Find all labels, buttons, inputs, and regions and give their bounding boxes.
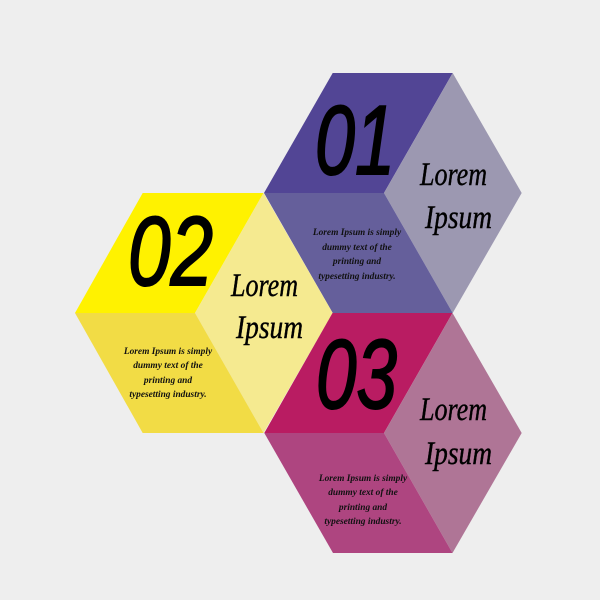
description text: dummy text of the xyxy=(133,361,203,371)
description text: typesetting industry. xyxy=(318,272,396,282)
description text: dummy text of the xyxy=(322,243,392,253)
face: heading panel 02 xyxy=(195,193,333,433)
face: description panel 01 xyxy=(264,193,453,313)
description text: printing and xyxy=(332,257,381,267)
face: number panel 03 xyxy=(264,313,452,433)
description text: dummy text of the xyxy=(328,488,398,498)
description text: typesetting industry. xyxy=(324,517,402,527)
description text: Lorem Ipsum is simply xyxy=(123,347,213,357)
face: number panel 02 xyxy=(75,193,264,313)
face: description panel 02 xyxy=(75,313,264,433)
heading: Lorem Ipsum: Ipsum xyxy=(235,310,303,346)
hexagon 01: purple xyxy=(264,73,522,313)
face: heading panel 03 xyxy=(384,313,522,553)
heading: Lorem Ipsum: Lorem xyxy=(230,268,298,304)
number 03: 03 xyxy=(316,319,397,429)
face: heading panel 01 xyxy=(384,73,522,313)
heading: Lorem Ipsum: Lorem xyxy=(419,392,487,428)
description text: Lorem Ipsum is simply xyxy=(318,474,408,484)
heading: Lorem Ipsum xyxy=(419,392,492,472)
number 01: 01 xyxy=(315,85,395,195)
heading: Lorem Ipsum: Ipsum xyxy=(424,436,492,472)
heading: Lorem Ipsum xyxy=(419,157,492,236)
description text: typesetting industry. xyxy=(129,390,207,400)
description text: printing and xyxy=(143,376,192,386)
number 02: 02 xyxy=(128,196,213,306)
description text: Lorem Ipsum is simply xyxy=(312,228,402,238)
description text: printing and xyxy=(338,503,387,513)
hexagon 02: yellow xyxy=(75,193,333,433)
face: number panel 01 xyxy=(264,73,453,193)
heading: Lorem Ipsum: Lorem xyxy=(419,157,487,193)
heading: Lorem Ipsum: Ipsum xyxy=(424,200,492,236)
face: description panel 03 xyxy=(264,433,452,553)
hexagon 03: magenta xyxy=(264,313,522,553)
heading: Lorem Ipsum xyxy=(230,268,303,346)
